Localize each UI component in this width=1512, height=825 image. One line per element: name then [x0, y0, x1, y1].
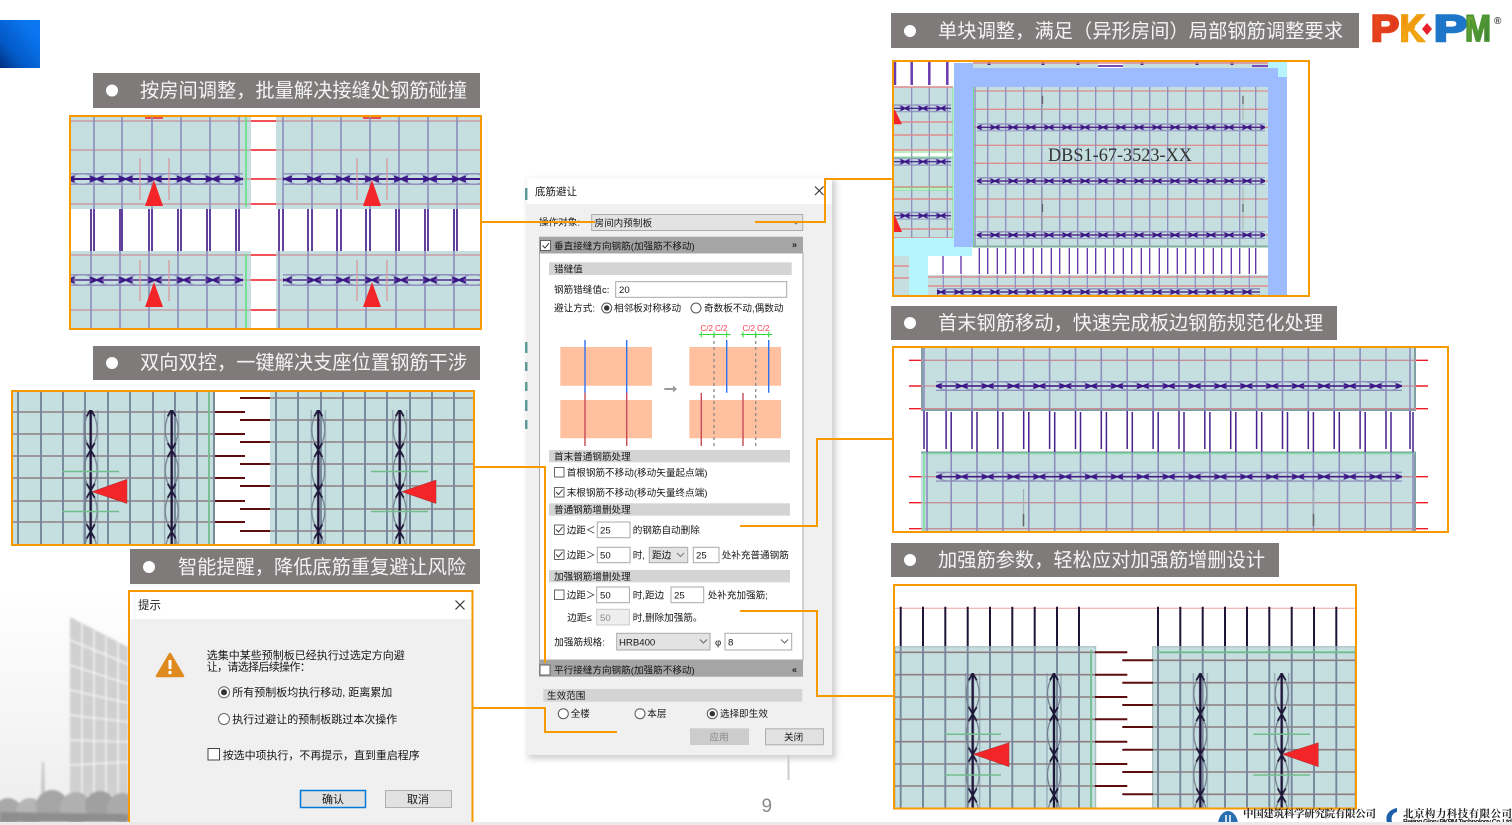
offset value group: 奇数板不动,偶数动: [704, 302, 784, 314]
icon: close: [456, 600, 464, 610]
main dialog: rebar avoidance: 底筋避让: [535, 185, 577, 198]
heading: bidirectional control: [93, 346, 480, 380]
stiffening rebar add/delete group: 8: [728, 638, 733, 648]
offset value group: 20: [619, 285, 630, 296]
stiffening rebar add/delete group: HRB400: [619, 638, 655, 648]
cyan columns: [893, 62, 1287, 295]
heading: end rebar movement: [891, 306, 1337, 340]
red arrows: [145, 180, 381, 307]
panel: reminder dialog: 提示: [138, 598, 161, 612]
normal rebar add/delete group: 25: [600, 526, 611, 536]
heading: single panel adjustment: 单块调整，满足（异形房间）局部钢筋调整要求: [938, 20, 1343, 42]
heading: stiffener parameters: 加强筋参数，轻松应对加强筋增删设计: [938, 550, 1265, 572]
stiffening rebar add/delete group: [549, 570, 792, 650]
rebar ends: [901, 607, 1336, 647]
section: vertical seam rebars: »: [792, 240, 797, 250]
operation target row: 操作对象:: [539, 216, 580, 228]
stiffening rebar add/delete group: 边距≤: [567, 613, 592, 624]
stiffening rebar add/delete group: 50: [600, 590, 611, 602]
heading: room adjustment: 按房间调整，批量解决接缝处钢筋碰撞: [140, 80, 467, 102]
diagram: offset before and after: C/2: [757, 324, 770, 333]
background building photo: [0, 590, 137, 825]
section: parallel seam rebars: «: [792, 664, 797, 674]
first and last rebar group: 首根钢筋不移动(移动矢量起点端): [567, 467, 707, 479]
radio options: [218, 685, 397, 726]
logo: PKPM: P: [1371, 8, 1399, 49]
logo: PKPM: K: [1400, 8, 1424, 49]
footer logos: 北京构力科技有限公司: [1403, 807, 1512, 820]
reminder message: 让，请选择后续操作：: [207, 660, 311, 674]
offset value group: 错缝值: [554, 263, 583, 275]
panel label: DBS1-67-3523-XX: [1048, 145, 1192, 166]
heading: stiffener parameters: [891, 543, 1279, 577]
diagram: offset before and after: C/2: [715, 324, 728, 333]
corner blue square: [0, 20, 40, 68]
button: close: [766, 729, 824, 745]
section: parallel seam rebars: 平行接缝方向钢筋(加强筋不移动): [554, 664, 695, 676]
effect scope group: 选择即生效: [720, 708, 768, 720]
connector arrows: [473, 179, 894, 732]
reminder message: [207, 648, 405, 674]
footer logos: [1218, 807, 1512, 825]
diagram: offset before and after: [560, 324, 781, 446]
heading: room adjustment: [93, 73, 480, 108]
radio options: 执行过避让的预制板跳过本次操作: [232, 712, 397, 726]
adjacent slabs: [893, 62, 1268, 295]
offset value group: 钢筋错缝值c:: [554, 284, 609, 296]
diagram: offset before and after: C/2: [700, 324, 714, 333]
icon: warning: [157, 654, 183, 676]
logo: PKPM: [1371, 8, 1502, 49]
normal rebar add/delete group: 边距＞: [567, 550, 595, 562]
effect scope group: 本层: [647, 708, 667, 720]
logo: PKPM: P: [1434, 8, 1467, 49]
purple rebar ends: [91, 209, 457, 251]
normal rebar add/delete group: 25: [696, 550, 707, 562]
operation target row: 房间内预制板: [594, 218, 652, 230]
blue wall: [954, 63, 1287, 295]
normal rebar add/delete group: [549, 503, 790, 563]
heading: smart reminder: [130, 549, 480, 584]
offset value group: 相邻板对称移动: [614, 302, 682, 314]
heading: single panel adjustment: [891, 13, 1359, 48]
reminder message: 选集中某些预制板已经执行过选定方向避: [207, 648, 405, 662]
button: cancel: [386, 790, 452, 808]
red arrows: [973, 743, 1318, 767]
panel: single slab plan: [893, 61, 1309, 296]
page number: 9: [762, 796, 772, 817]
offset value group: [549, 262, 792, 314]
stiffening rebar add/delete group: 加强钢筋增删处理: [554, 571, 631, 583]
button: confirm: 确认: [322, 793, 344, 806]
normal rebar add/delete group: 普通钢筋增删处理: [554, 504, 631, 516]
button: apply: [690, 728, 749, 745]
red arrows: [92, 479, 436, 504]
diagram: offset before and after: C/2: [742, 324, 756, 333]
do not remind checkbox: 按选中项执行，不再提示，直到重启程序: [223, 748, 420, 762]
stiffening rebar add/delete group: 时,距边: [633, 590, 665, 602]
first and last rebar group: 末根钢筋不移动(移动矢量终点端): [567, 487, 707, 499]
section: vertical seam rebars: [539, 237, 803, 660]
normal rebar add/delete group: 时,: [633, 550, 645, 562]
stiffening rebar add/delete group: 时,删除加强筋。: [633, 612, 703, 624]
effect scope group: 生效范围: [547, 690, 585, 702]
logo: PKPM: M: [1465, 8, 1491, 49]
icon: close: [815, 186, 824, 195]
section: vertical seam rebars: 垂直接缝方向钢筋(加强筋不移动): [554, 240, 695, 252]
purple rebar ends: [924, 411, 1413, 452]
effect scope group: [543, 689, 802, 720]
normal rebar add/delete group: 50: [600, 550, 611, 562]
stiffening rebar add/delete group: φ: [715, 638, 721, 648]
panel: room adjustment plan: [70, 116, 481, 329]
stiffening rebar add/delete group: 25: [674, 590, 685, 602]
panel: stiffener plan: [894, 585, 1356, 808]
panel: end rebar plan: [893, 346, 1448, 532]
normal rebar add/delete group: 的钢筋自动删除: [633, 524, 700, 536]
section: parallel seam rebars: [539, 660, 803, 677]
offset value group: 避让方式:: [554, 302, 595, 314]
heading: smart reminder: 智能提醒，降低底筋重复避让风险: [178, 556, 466, 578]
purple rebar ends: [979, 248, 1256, 274]
stiffening rebar add/delete group: 边距＞: [567, 590, 595, 602]
normal rebar add/delete group: 距边: [652, 550, 672, 562]
button: close: 关闭: [784, 732, 803, 744]
effect scope group: 全楼: [571, 708, 590, 720]
operation target row: [539, 214, 803, 230]
first and last rebar group: [549, 450, 790, 499]
panel: support rebar plan: [12, 391, 474, 545]
stiffening rebar add/delete group: 加强筋规格:: [554, 636, 605, 648]
main dialog: rebar avoidance: [525, 178, 836, 759]
radio options: 所有预制板均执行移动, 距离累加: [232, 685, 392, 699]
panel: reminder dialog: [129, 591, 473, 822]
room slab: [973, 87, 1268, 247]
heading: bidirectional control: 双向双控，一键解决支座位置钢筋干涉: [140, 352, 467, 374]
first and last rebar group: 首末普通钢筋处理: [554, 451, 631, 463]
button: apply: 应用: [710, 732, 729, 744]
logo: PKPM: ®: [1494, 16, 1502, 27]
button: cancel: 取消: [407, 792, 429, 806]
normal rebar add/delete group: 边距＜: [567, 526, 595, 536]
footer logos: 中国建筑科学研究院有限公司: [1243, 807, 1376, 820]
button: confirm: [300, 790, 366, 808]
stiffening rebar add/delete group: 处补充加强筋;: [708, 590, 768, 602]
normal rebar add/delete group: 处补充普通钢筋: [722, 550, 789, 562]
stiffening rebar add/delete group: 50: [600, 613, 611, 624]
heading: end rebar movement: 首末钢筋移动，快速完成板边钢筋规范化处理: [938, 312, 1323, 334]
slabs: [71, 117, 480, 328]
